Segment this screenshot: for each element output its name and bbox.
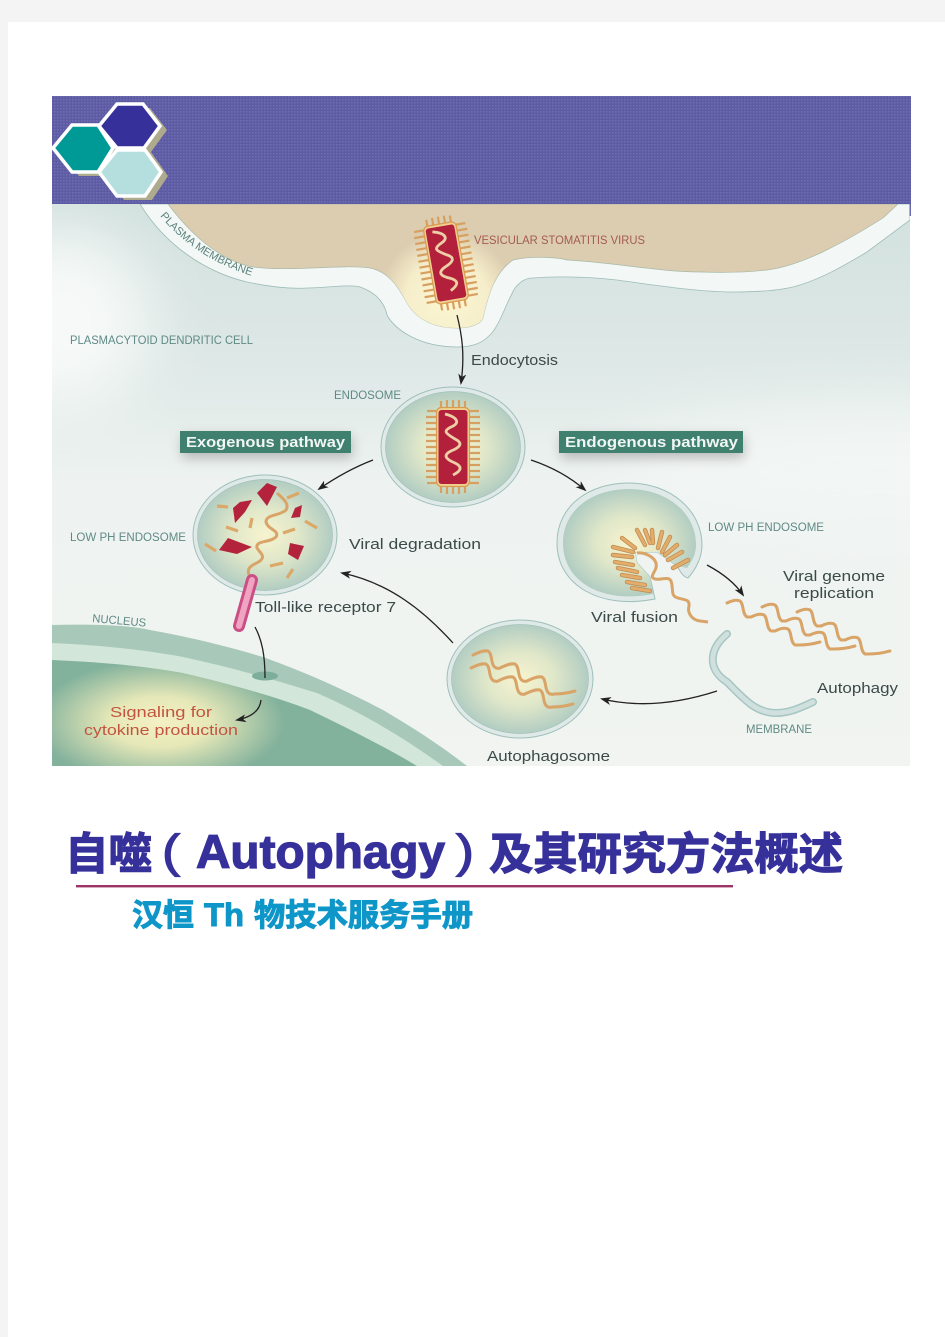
- subtitle: 物技术服务手册: [254, 898, 473, 933]
- label: signaling for cytokine production: [84, 704, 238, 739]
- title underline: [76, 885, 733, 887]
- label: autophagy: Autophagy: [817, 680, 899, 697]
- low pH endosome with degraded virus: [193, 475, 337, 595]
- label: membrane: MEMBRANE: [746, 724, 812, 736]
- label: low pH endosome left: LOW PH ENDOSOME: [70, 532, 186, 544]
- label: viral fusion: Viral fusion: [591, 609, 678, 626]
- label: viral genome replication: Viral genome: [783, 568, 885, 585]
- cytoplasm background: [0, 204, 945, 766]
- label: signaling for cytokine production: Signaling for: [110, 704, 212, 721]
- autophagosome: [447, 620, 593, 738]
- subtitle: 汉恒: [132, 898, 194, 933]
- extracellular space: [168, 204, 898, 328]
- label: viral genome replication: replication: [794, 585, 874, 602]
- viral RNA escaping: [637, 553, 708, 622]
- label: endocytosis: Endocytosis: [471, 352, 558, 369]
- label: vesicular stomatitis virus: VESICULAR STOMATITIS VIRUS: [474, 235, 645, 247]
- arched viral spikes: [613, 530, 688, 591]
- subtitle: Th: [204, 897, 244, 933]
- low pH endosome with viral fusion: [557, 483, 708, 622]
- replicated viral genome strands: [727, 600, 890, 654]
- label: plasma membrane: PLASMA MEMBRANE: [160, 212, 253, 276]
- label: viral genome replication: [783, 568, 885, 602]
- autophagy membrane: [713, 634, 813, 713]
- callout: exogenous pathway: [180, 431, 352, 458]
- viral protein fragments: [219, 483, 304, 560]
- arrow: to exogenous endosome: [319, 460, 373, 489]
- label: toll-like receptor 7: Toll-like receptor 7: [255, 599, 396, 616]
- captured viral genome: [471, 651, 575, 707]
- arrow: autophagosome to low pH endosome: [342, 573, 453, 643]
- arrow: receptor to nucleus: [255, 627, 265, 678]
- arrow: fusion to replication: [707, 565, 743, 595]
- title: 及其研究方法概述: [489, 830, 843, 879]
- logo: three hexagons: [53, 104, 168, 200]
- hexagon shadows: [60, 108, 168, 200]
- subtitle: [132, 897, 473, 933]
- small spike fragments: [205, 493, 317, 578]
- hexagon: teal: [53, 125, 113, 172]
- arrow: endocytosis: [457, 315, 463, 383]
- label: endosome: ENDOSOME: [334, 390, 401, 402]
- arrow: to endogenous endosome: [531, 460, 585, 490]
- title: Autophagy: [196, 825, 445, 878]
- title: [65, 825, 843, 879]
- hexagon: pale teal: [99, 150, 161, 196]
- viral RNA strand: [248, 493, 287, 575]
- icon: vesicular stomatitis virus in pocket: [414, 215, 478, 311]
- toll-like receptor 7: [239, 580, 252, 626]
- callout: exogenous pathway: Exogenous pathway: [186, 434, 346, 451]
- label: signaling for cytokine production: cytokine production: [84, 722, 238, 739]
- title: 自噬: [65, 830, 152, 879]
- hexagon: dark blue: [99, 104, 160, 148]
- label: plasmacytoid dendritic cell: PLASMACYTOID DENDRITIC CELL: [70, 335, 254, 347]
- nucleus: [52, 625, 467, 766]
- header banner: [52, 96, 911, 216]
- plasma membrane: [140, 204, 910, 347]
- label: viral degradation: Viral degradation: [349, 536, 481, 553]
- callout: endogenous pathway: [559, 431, 744, 458]
- label: low pH endosome right: LOW PH ENDOSOME: [708, 522, 824, 534]
- label: nucleus: NUCLEUS: [92, 613, 147, 630]
- illustration: viral autophagy pathway diagram: [52, 204, 910, 766]
- title: (: [162, 825, 181, 877]
- arrow: signaling: [237, 700, 261, 720]
- label: autophagosome: Autophagosome: [487, 748, 610, 765]
- callout: endogenous pathway: Endogenous pathway: [565, 434, 739, 451]
- arrow: autophagy to autophagosome: [602, 691, 717, 704]
- endosome with virus: [381, 387, 525, 507]
- receptor highlight: [239, 580, 252, 626]
- title: ): [456, 825, 474, 877]
